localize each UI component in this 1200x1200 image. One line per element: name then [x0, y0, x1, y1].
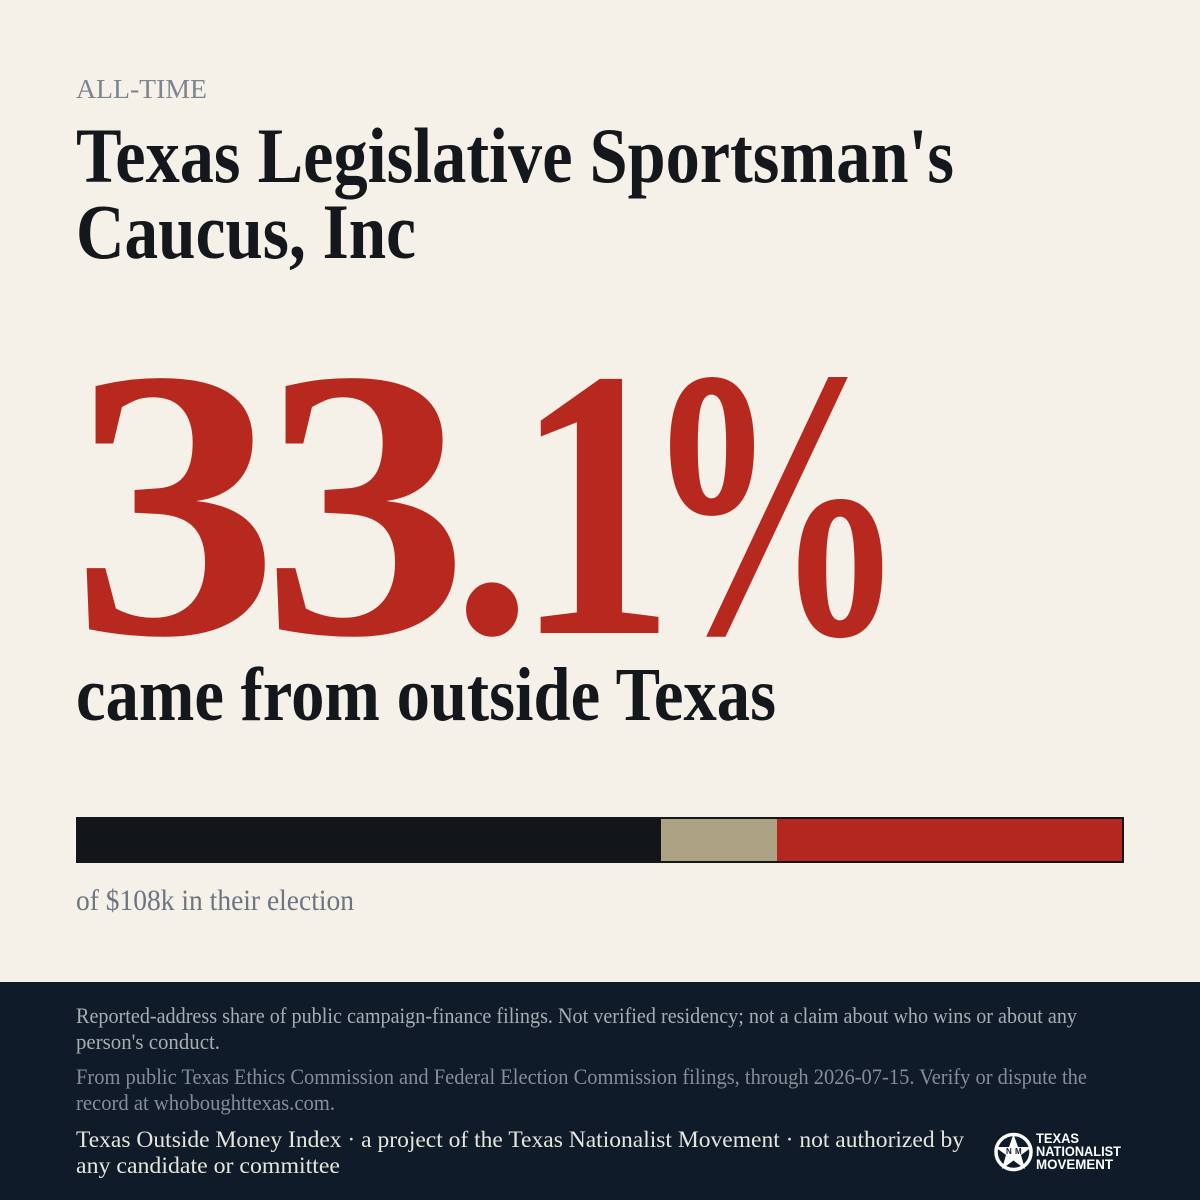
- logo: Texas Nationalist Movement: [995, 1130, 1121, 1172]
- big statistic: 33.1%: 3: [71, 291, 279, 717]
- attribution text: Texas Outside Money Index · a project of the Texas Nationalist Movement · not authorized by: [76, 1127, 964, 1152]
- footer panel: [0, 982, 1200, 1200]
- big statistic: 33.1%: %: [643, 291, 907, 717]
- source text: From public Texas Ethics Commission and Federal Election Commission filings, through 2026-07-15. Verify or dispute the: [76, 1064, 1087, 1089]
- disclaimer text: person's conduct.: [76, 1029, 220, 1054]
- title: [76, 112, 954, 275]
- statistic caption: came from outside Texas: [76, 653, 776, 737]
- logo: Texas Nationalist Movement: M: [1015, 1147, 1022, 1156]
- disclaimer text: Reported-address share of public campaign-finance filings. Not verified residency; not a claim about who wins or about any: [76, 1003, 1077, 1028]
- source text: [76, 1064, 1087, 1115]
- big statistic: 33.1%: 3: [261, 291, 469, 717]
- logo: Texas Nationalist Movement: TEXAS: [1036, 1130, 1079, 1146]
- big statistic: 33.1%: [71, 291, 907, 717]
- bar caption: of $108k in their election: [76, 884, 354, 917]
- source text: record at whoboughttexas.com.: [76, 1090, 335, 1115]
- logo: Texas Nationalist Movement: MOVEMENT: [1036, 1156, 1113, 1172]
- logo: Texas Nationalist Movement: NATIONALIST: [1036, 1143, 1121, 1159]
- stacked bar: [76, 817, 1124, 863]
- disclaimer text: [76, 1003, 1077, 1054]
- title: Caucus, Inc: [76, 188, 416, 275]
- big statistic: 33.1%: 1: [515, 291, 675, 717]
- big statistic: 33.1%: .: [452, 334, 532, 705]
- attribution text: [76, 1127, 964, 1178]
- logo: Texas Nationalist Movement: N: [1006, 1147, 1012, 1156]
- attribution text: any candidate or committee: [76, 1153, 340, 1178]
- eyebrow: all-time: ALL-TIME: [76, 74, 207, 104]
- title: Texas Legislative Sportsman's: [76, 112, 954, 199]
